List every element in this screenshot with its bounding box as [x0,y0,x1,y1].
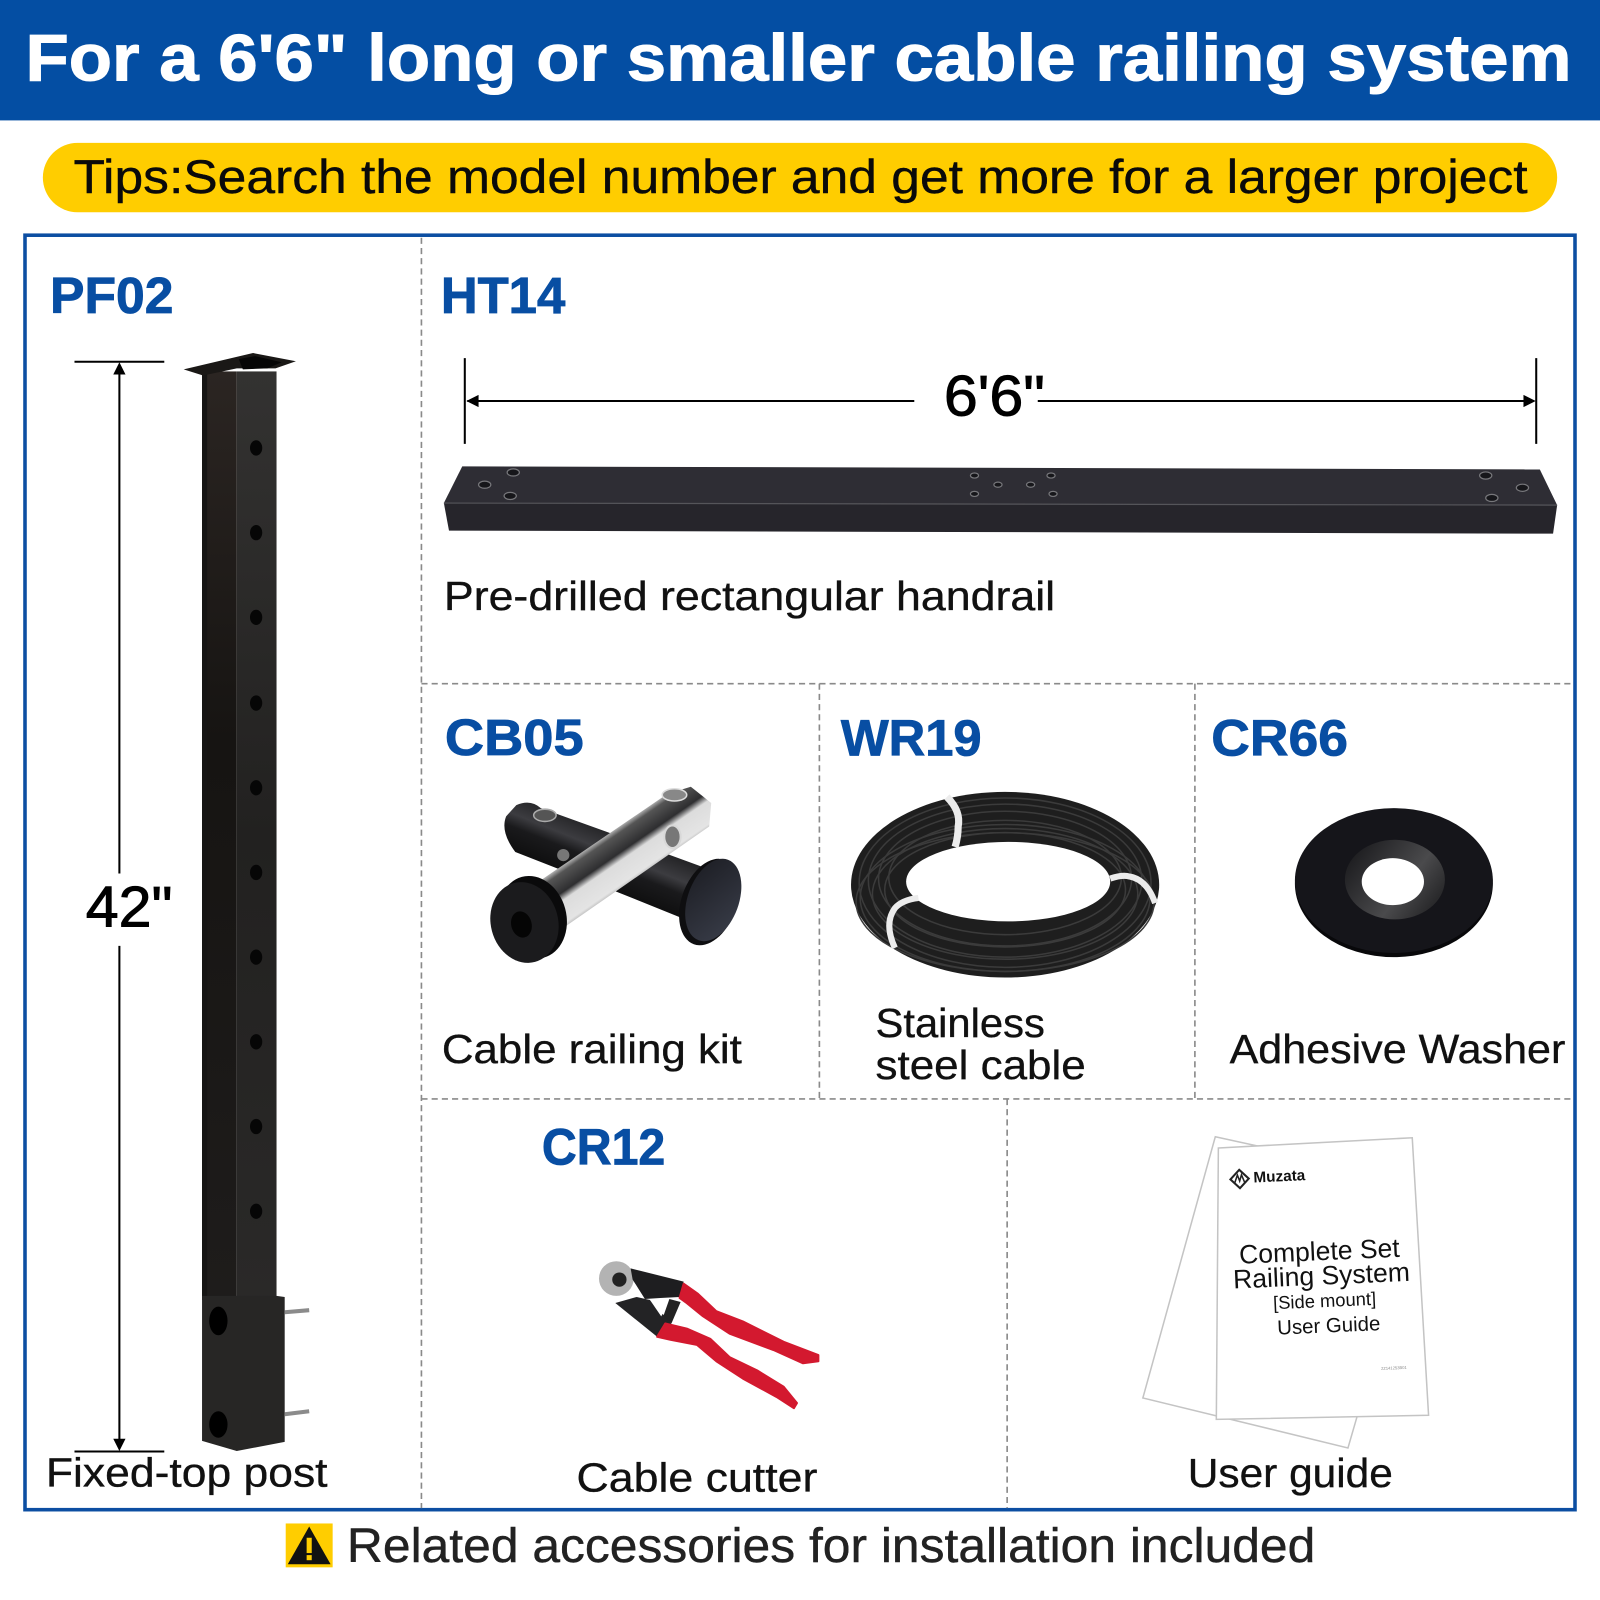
PF02 code: PF02 [50,267,173,324]
kit caption: Cable railing kit [442,1026,743,1072]
panel: user guide [1143,1137,1429,1496]
WR19 code: WR19 [841,710,982,767]
handrail illustration [444,466,1557,534]
HT14 code: HT14 [441,267,566,324]
post caption: Fixed-top post [46,1450,328,1496]
cable caption: Stainless [876,1000,1045,1046]
guide booklet illustration: Railing System [1232,1257,1410,1295]
kit illustration [481,787,752,971]
guide booklet illustration: User Guide [1277,1313,1381,1340]
accessories note [286,1520,1315,1573]
cutter caption: Cable cutter [577,1454,817,1500]
title: For a 6'6" long or smaller cable railing system [26,22,1571,96]
cable coil illustration [851,792,1159,978]
6'6 label: 6'6" [944,364,1045,428]
guide booklet illustration: Muzata [1253,1167,1306,1186]
panel: HT14 handrail [441,267,1557,619]
panel: PF02 fixed-top post [46,267,328,1496]
height dimension arrow [74,362,164,1452]
42 inch label: 42" [86,876,172,940]
parts panel frame [25,235,1575,1510]
guide booklet illustration: Complete Set [1238,1233,1401,1270]
guide caption: User guide [1188,1450,1393,1496]
post illustration [184,353,309,1451]
cable caption line two: steel cable [876,1042,1086,1088]
CB05 code: CB05 [445,709,584,766]
panel: CB05 cable railing kit [442,709,752,1072]
panel: CR66 adhesive washer [1211,710,1565,1072]
cutter illustration [599,1261,818,1408]
note text: Related accessories for installation included [347,1520,1315,1573]
handrail caption: Pre-drilled rectangular handrail [444,573,1055,619]
washer caption: Adhesive Washer [1230,1026,1565,1072]
guide booklet illustration: [Side mount] [1273,1288,1377,1313]
tips text: Tips:Search the model number and get more for a larger project [73,151,1528,203]
washer illustration [1295,808,1493,957]
length dimension arrow [465,358,1536,444]
tips pill [43,143,1557,212]
header banner [0,0,1600,120]
icon: warning triangle [286,1523,333,1567]
CR66 code: CR66 [1211,710,1348,767]
guide booklet illustration: 2Z141253B01 [1381,1365,1408,1371]
guide booklet illustration [1143,1137,1429,1448]
panel: WR19 stainless steel cable [841,710,1159,1088]
panel: CR12 cable cutter [542,1118,818,1500]
CR12 code: CR12 [542,1118,665,1175]
